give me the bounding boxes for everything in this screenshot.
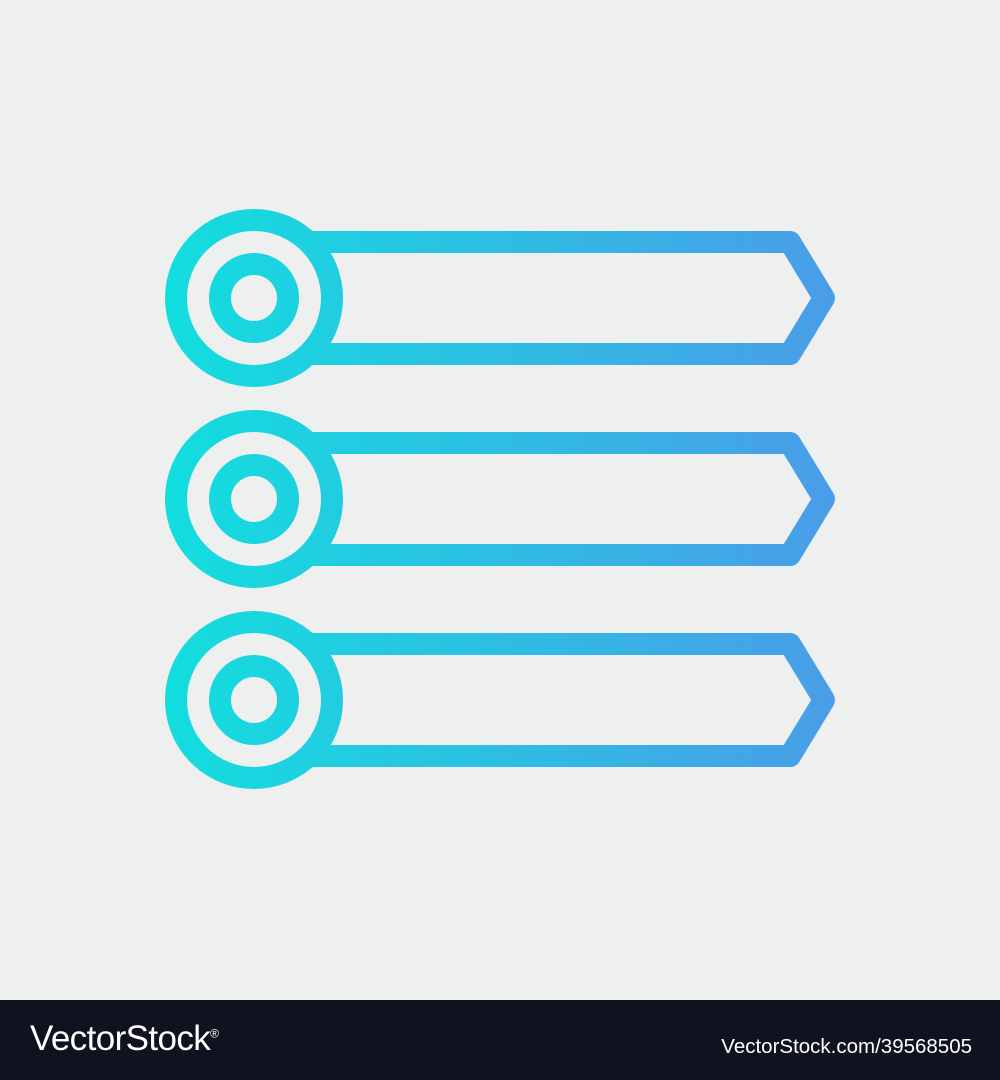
row 3 [176,622,824,778]
footer url text: VectorStock.com/39568505 [721,1035,972,1058]
footer logo text: VectorStock® [30,1019,218,1058]
row 2 [176,421,824,577]
footer bar [0,1000,1000,1080]
row 1 [176,220,824,376]
